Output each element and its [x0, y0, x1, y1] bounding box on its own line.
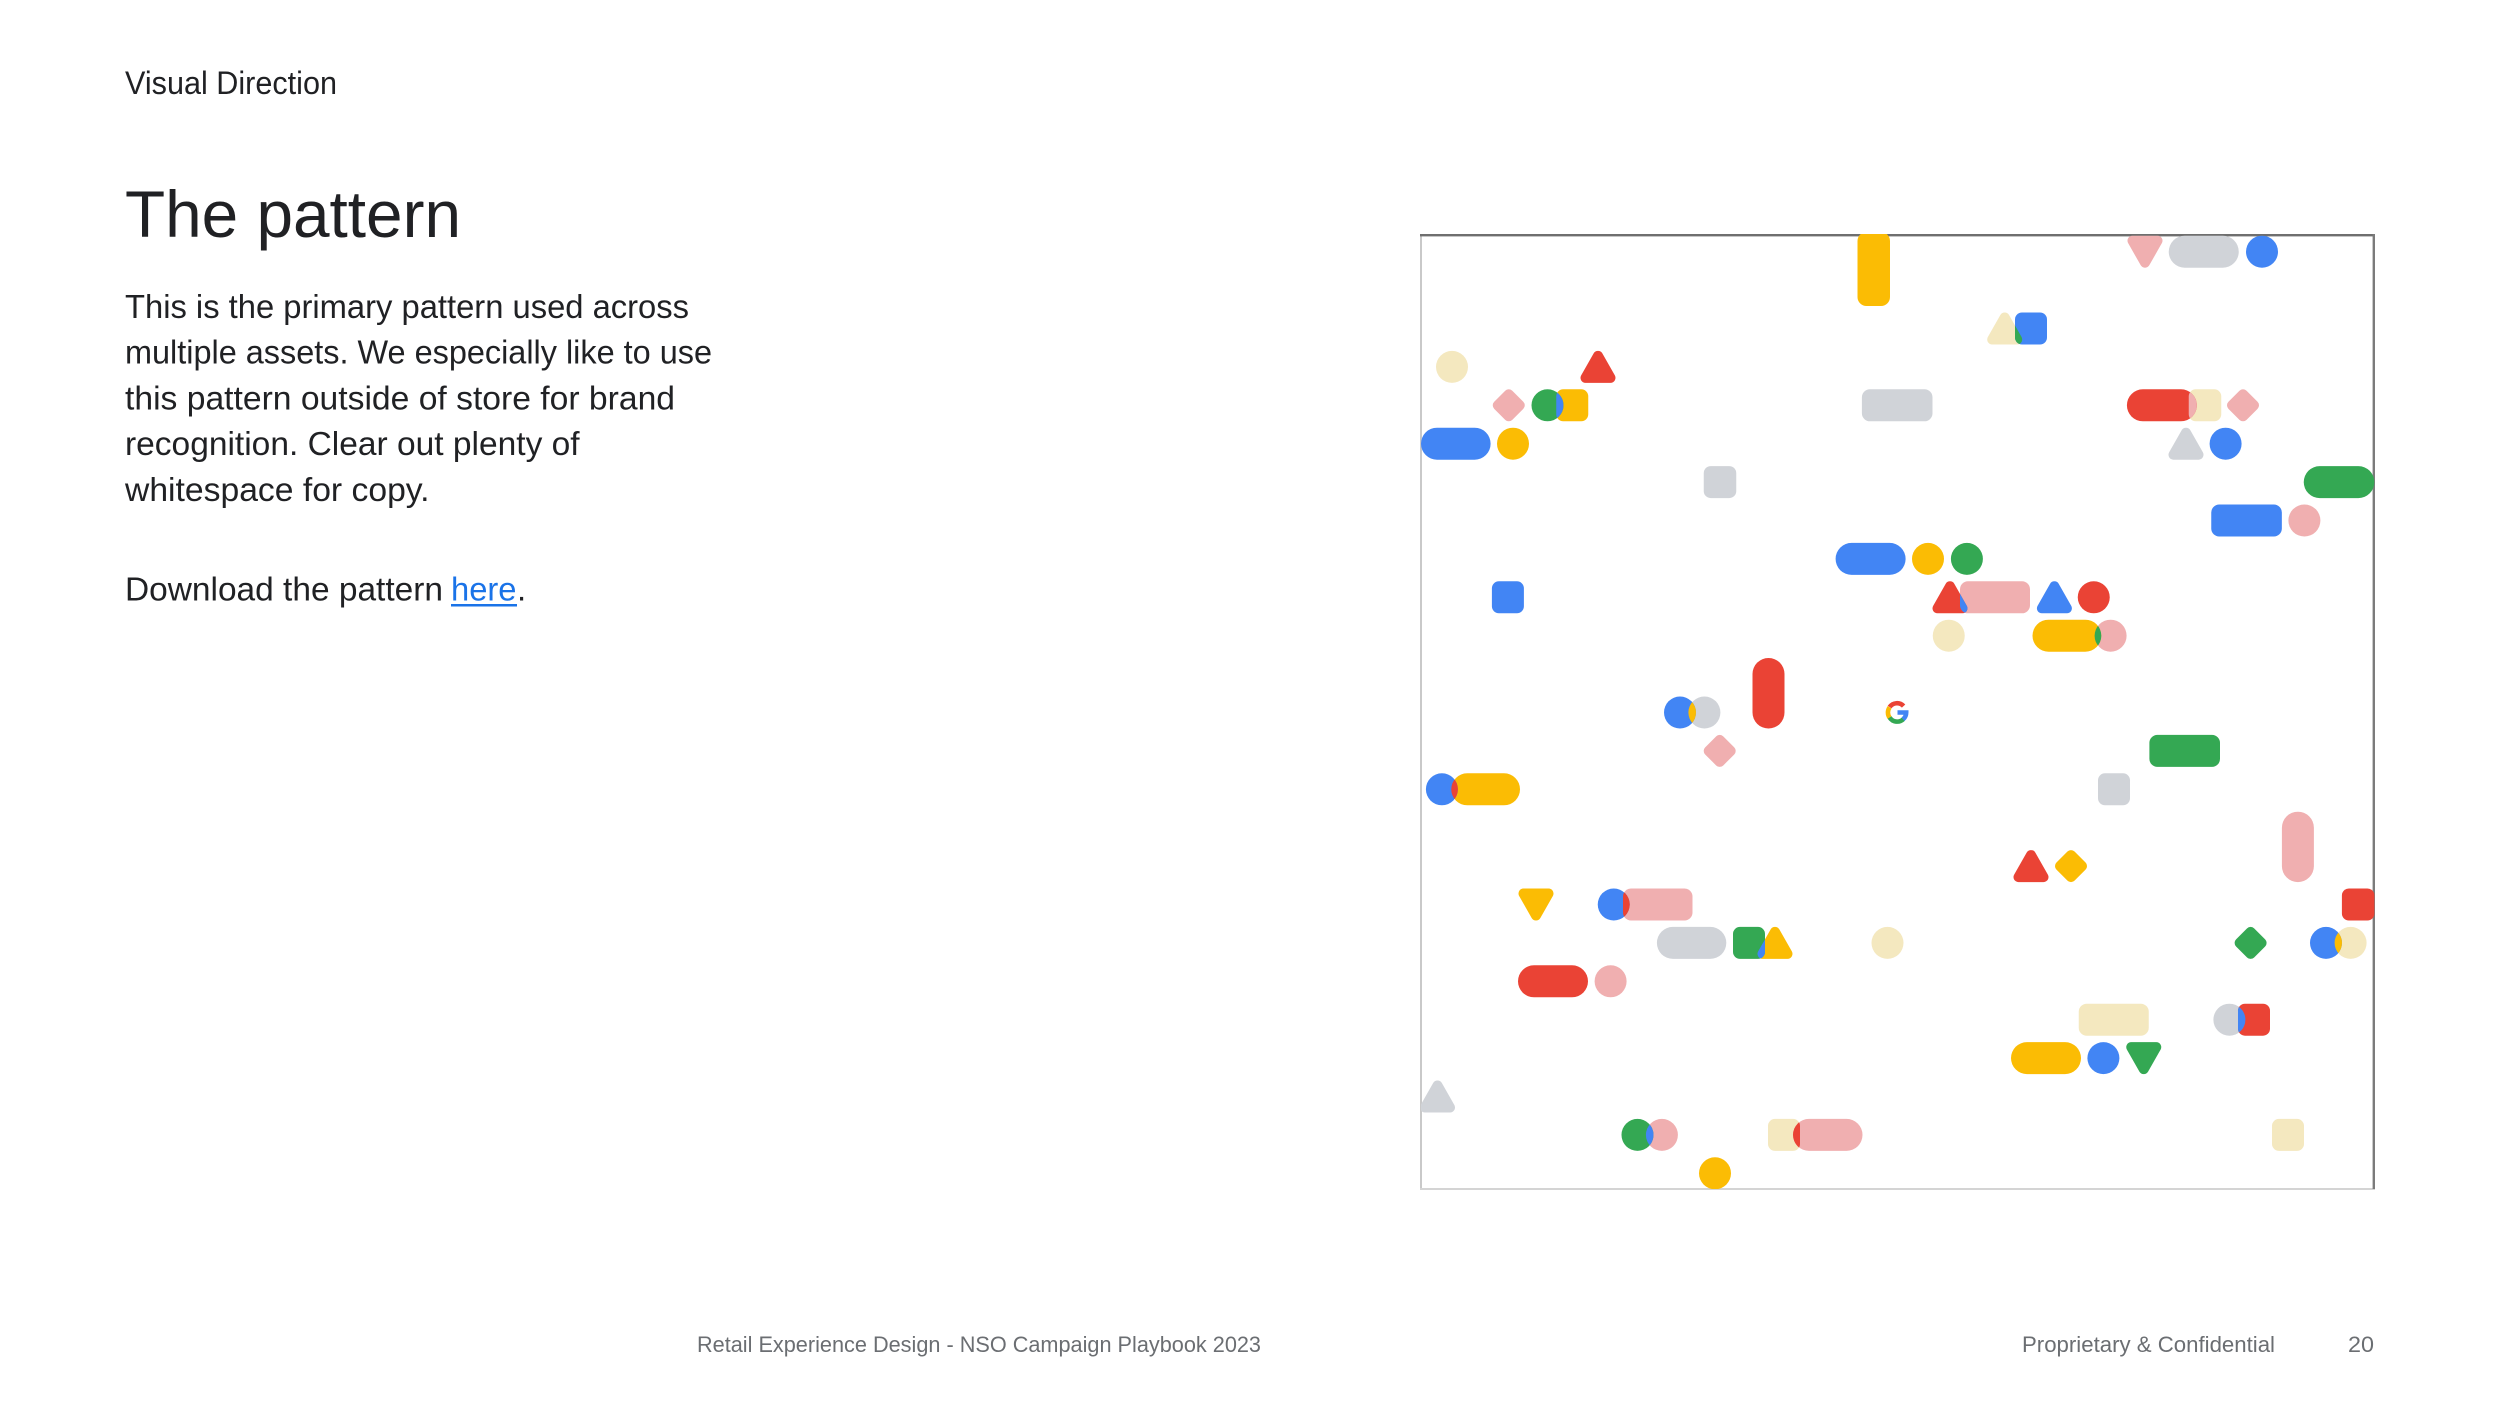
footer: page number: 20	[2348, 1332, 2374, 1357]
pink diamond	[1704, 735, 1736, 767]
beige circle	[1436, 351, 1468, 383]
red pill and pink circle	[1518, 965, 1627, 997]
pattern shapes	[1420, 232, 2374, 1189]
body text: pattern description	[124, 288, 712, 508]
gray triangle and blue circle	[2168, 428, 2242, 460]
pink diamond, green circle, yellow square	[1493, 389, 1588, 421]
icon: Google G logo	[1888, 703, 1906, 722]
body text: pattern description: multiple assets. We especially like to use	[125, 334, 712, 371]
section label: Visual Direction: Visual Direction	[125, 65, 337, 101]
gray square	[2098, 773, 2130, 805]
yellow pill and pink circle	[2032, 620, 2127, 652]
blue circle and yellow pill	[1426, 773, 1520, 805]
beige rectangle	[2079, 1004, 2149, 1036]
frame border	[1420, 234, 2375, 1190]
green pill, right edge	[2304, 466, 2374, 498]
download link line: Download the pattern	[125, 570, 443, 608]
yellow vertical bar, top	[1858, 232, 1890, 306]
title: The pattern: The pattern	[125, 177, 461, 251]
beige circle	[1872, 927, 1904, 959]
green rectangle	[2149, 735, 2220, 767]
footer: confidentiality notice: Proprietary & Confidential	[2022, 1332, 2275, 1357]
yellow inverted triangle	[1518, 888, 1554, 921]
footer: document name: Retail Experience Design - NSO Campaign Playbook 2023	[697, 1332, 1261, 1357]
blue pill, yellow and green circles	[1836, 543, 1983, 575]
red square, right edge	[2342, 888, 2374, 920]
top row cluster: pink triangle, gray pill, blue circle	[2127, 236, 2278, 268]
pink vertical pill	[2282, 812, 2314, 882]
blue square	[1492, 581, 1524, 613]
panel: pattern frame	[1420, 232, 2375, 1190]
green diamond	[2235, 927, 2267, 959]
blue and beige circles	[2310, 927, 2367, 959]
body text: pattern description: this pattern outside of store for brand	[125, 379, 675, 416]
red pill, beige square, pink diamond	[2127, 389, 2259, 421]
beige circle	[1933, 620, 1965, 652]
red triangle, pink rectangle, blue triangle, red circle	[1932, 581, 2110, 613]
green and pink circles	[1622, 1119, 1678, 1151]
gray pill, green square, yellow triangle	[1657, 927, 1793, 959]
blue and gray circles	[1664, 696, 1720, 728]
body text: pattern description: This is the primary pattern used across	[125, 288, 689, 325]
red triangle	[1580, 351, 1616, 383]
yellow pill, blue circle, green inverted triangle	[2011, 1042, 2161, 1074]
gray rounded rectangle	[1862, 389, 1932, 421]
beige square	[2272, 1119, 2304, 1151]
red triangle and yellow diamond	[2013, 850, 2087, 882]
gray circle and red square	[2213, 1004, 2270, 1036]
blue circle and pink rectangle	[1598, 888, 1692, 920]
gray triangle, left edge	[1420, 1080, 1455, 1112]
red vertical pill	[1752, 658, 1784, 728]
body text: pattern description: recognition. Clear out plenty of	[125, 425, 580, 462]
blue pill and yellow circle	[1421, 428, 1529, 460]
download link line: here	[451, 570, 516, 608]
body text: pattern description: whitespace for copy.	[124, 471, 430, 508]
blue rectangle and pink circle	[2211, 504, 2320, 536]
download link line: .	[517, 570, 526, 608]
beige triangle and blue square	[1987, 312, 2047, 345]
yellow circle, bottom edge	[1699, 1157, 1731, 1189]
gray square	[1704, 466, 1736, 498]
beige square and pink pill	[1768, 1119, 1862, 1151]
